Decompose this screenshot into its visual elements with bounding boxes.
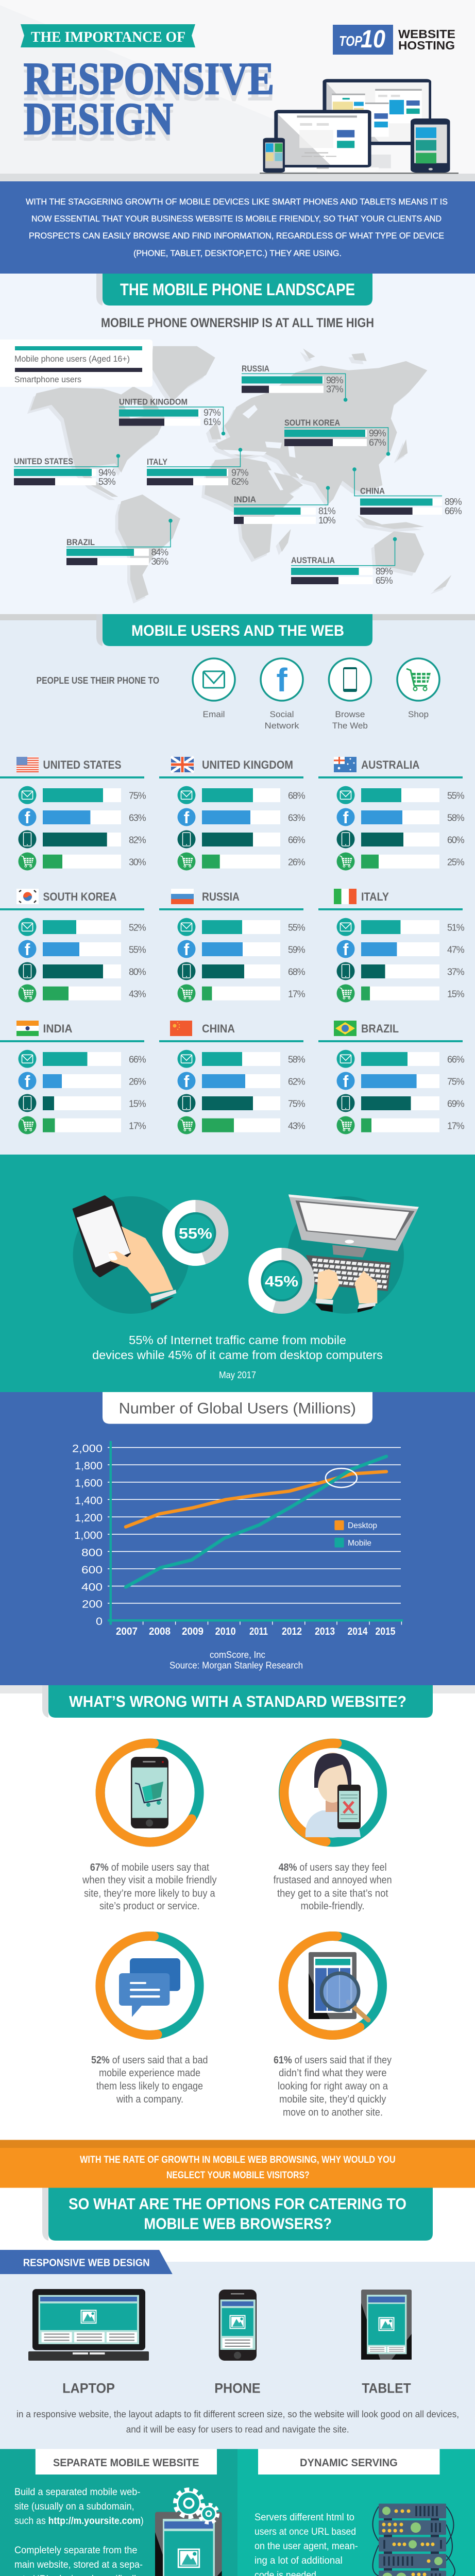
line chart: 1,400 bbox=[75, 1495, 103, 1506]
map stat: united kingdom: 61% bbox=[203, 417, 221, 427]
text: 52 percent bbox=[91, 2055, 208, 2105]
text: 67 percent: site’s product or service. bbox=[99, 1901, 200, 1912]
card: australia bbox=[318, 757, 465, 871]
card: brazil: 75% bbox=[447, 1077, 465, 1087]
card: australia: 60% bbox=[447, 835, 465, 845]
line chart: 2007 bbox=[116, 1626, 138, 1637]
card: south korea: 80% bbox=[129, 967, 146, 977]
map stat: australia: 89% bbox=[376, 566, 393, 577]
title: responsive design: RESPONSIVE bbox=[24, 60, 274, 110]
text: people use their phone to: PEOPLE USE THEIR PHONE TO bbox=[37, 675, 159, 686]
text: 52 percent: with a company. bbox=[116, 2094, 183, 2105]
line chart: 2009 bbox=[182, 1626, 203, 1637]
card: united states bbox=[0, 757, 146, 871]
card: brazil: BRAZIL bbox=[361, 1022, 399, 1035]
logo: top10 website hosting: TOP bbox=[339, 33, 362, 49]
text: 61 percent: mobile site, they’d quickly bbox=[279, 2094, 386, 2105]
flag: russia bbox=[171, 889, 194, 904]
card: south korea: 55% bbox=[129, 945, 146, 955]
chart legend: Desktop bbox=[348, 1521, 377, 1530]
card: united states: UNITED STATES bbox=[43, 758, 122, 771]
panel: number of global users chart bbox=[0, 1392, 475, 1685]
icon: server rack bbox=[373, 2504, 455, 2576]
heading: number of global users bbox=[103, 1392, 372, 1424]
caption: 55% of Internet traffic came from mobile bbox=[129, 1333, 346, 1347]
map stat: brazil: BRAZIL bbox=[66, 537, 95, 547]
heading: the mobile phone landscape: THE MOBILE PHONE LANDSCAPE bbox=[120, 280, 355, 299]
card: united kingdom: 66% bbox=[288, 835, 306, 845]
logo: top10 website hosting: HOSTING bbox=[398, 39, 455, 52]
card: india: 66% bbox=[129, 1055, 146, 1065]
card: south korea: 52% bbox=[129, 923, 146, 933]
device: phone: PHONE bbox=[214, 2380, 261, 2396]
text: 48 percent: they get to a site that’s not bbox=[277, 1888, 388, 1899]
illustration: responsive devices bbox=[260, 79, 459, 174]
subheading: MOBILE PHONE OWNERSHIP IS AT ALL TIME HIGH bbox=[101, 316, 374, 330]
text: 61 percent: move on to another site. bbox=[283, 2107, 383, 2118]
text: 67 percent: 67% of mobile users say that bbox=[90, 1862, 209, 1873]
card: russia: RUSSIA bbox=[202, 890, 240, 903]
heading: options for mobile web browsers: SO WHAT ARE THE OPTIONS FOR CATERING TO bbox=[69, 2195, 406, 2213]
heading: the mobile phone landscape bbox=[96, 274, 372, 306]
map stat: russia: 37% bbox=[326, 384, 344, 395]
card: russia bbox=[159, 889, 306, 1003]
map stat: united states: 53% bbox=[98, 477, 116, 487]
title: responsive design: DESIGN bbox=[24, 94, 173, 144]
panel: intro text: WITH THE STAGGERING GROWTH OF MOBILE DEVICES LIKE SMART PHONES AND TABLETS MEANS IT IS bbox=[26, 197, 448, 207]
line chart: 2011 bbox=[249, 1626, 268, 1637]
panel: what's wrong with a standard website bbox=[0, 1685, 475, 2140]
panel: intro text bbox=[0, 181, 475, 274]
text: separate mobile description: Completely separate from the bbox=[14, 2545, 137, 2556]
donut: 45 percent: 45% bbox=[265, 1274, 298, 1290]
card: india: 26% bbox=[129, 1077, 146, 1087]
map stat: brazil: 84% bbox=[151, 547, 168, 557]
flag: brazil bbox=[334, 1021, 357, 1036]
text: 67 percent bbox=[82, 1862, 217, 1912]
label: separate mobile website: SEPARATE MOBILE WEBSITE bbox=[53, 2457, 199, 2469]
line chart: 1,000 bbox=[74, 1530, 103, 1541]
heading: what's wrong bbox=[42, 1685, 433, 1718]
map stat: italy bbox=[147, 448, 249, 487]
text: separate mobile description: such as http://m.yoursite.com) bbox=[14, 2516, 144, 2527]
map stat: china: 89% bbox=[445, 497, 462, 507]
heading: options for mobile web browsers: MOBILE WEB BROWSERS? bbox=[144, 2214, 332, 2233]
card: china: 58% bbox=[288, 1055, 306, 1065]
donut: 55 percent bbox=[168, 1206, 222, 1260]
text: 61 percent: 61% of users said that if they bbox=[274, 2055, 392, 2066]
banner: rate of growth: WITH THE RATE OF GROWTH IN MOBILE WEB BROWSING, WHY WOULD YOU bbox=[80, 2155, 396, 2165]
map stat: united states: UNITED STATES bbox=[14, 456, 73, 466]
card: china: 75% bbox=[288, 1099, 306, 1109]
text: separate mobile description: Build a separated mobile web- bbox=[14, 2487, 140, 2498]
donut: 55 percent: 55% bbox=[179, 1226, 212, 1242]
text: dynamic serving description: ing a lot of additional bbox=[255, 2555, 343, 2566]
text: dynamic serving description: on the user agent, mean- bbox=[255, 2541, 358, 2552]
card: united kingdom: UNITED KINGDOM bbox=[202, 758, 293, 771]
panel: intro text: (PHONE, TABLET, DESKTOP,ETC.) THEY ARE USING. bbox=[133, 248, 342, 258]
card: italy: 47% bbox=[447, 945, 465, 955]
card: united states: 75% bbox=[129, 791, 146, 801]
line chart: 2015 bbox=[375, 1626, 396, 1637]
line chart: 200 bbox=[82, 1599, 103, 1611]
card: italy: 15% bbox=[447, 989, 465, 999]
map stat: india: 81% bbox=[318, 506, 336, 516]
card: brazil: 69% bbox=[447, 1099, 465, 1109]
icon: tablet and magnifier bbox=[309, 1952, 368, 2020]
label: responsive web design bbox=[0, 2250, 173, 2274]
line chart: 1,200 bbox=[75, 1512, 103, 1524]
flag: australia bbox=[334, 757, 357, 772]
map stat: india bbox=[234, 486, 336, 526]
heading: what's wrong: WHAT’S WRONG WITH A STANDARD WEBSITE? bbox=[69, 1692, 406, 1710]
stat: 52 percent bbox=[91, 1936, 208, 2105]
map stat: australia bbox=[291, 537, 397, 586]
logo: top10 website hosting: 10 bbox=[361, 26, 385, 53]
card: brazil: 17% bbox=[447, 1121, 465, 1131]
illustration: desktop and keyboard bbox=[287, 1194, 419, 1314]
banner: rate of growth: NEGLECT YOUR MOBILE VISITORS? bbox=[166, 2170, 310, 2181]
stat: 61 percent bbox=[274, 1936, 392, 2118]
line chart: 2010 bbox=[215, 1626, 236, 1637]
card: india: 17% bbox=[129, 1121, 146, 1131]
panel: mobile users and the web bbox=[0, 614, 475, 1155]
title: responsive design: RESPONSIVE bbox=[24, 54, 274, 104]
chart source: Source: Morgan Stanley Research bbox=[169, 1660, 303, 1671]
ribbon: the importance of: THE IMPORTANCE OF bbox=[31, 29, 185, 45]
card: italy: ITALY bbox=[361, 890, 389, 903]
map stat: united states bbox=[14, 454, 120, 487]
text: 67 percent: site, they’re more likely to buy a bbox=[84, 1888, 215, 1899]
map stat: india: 10% bbox=[318, 515, 336, 526]
label: dynamic serving bbox=[258, 2449, 440, 2475]
map stat: china bbox=[352, 467, 462, 516]
line chart: 600 bbox=[81, 1564, 103, 1576]
logo: top10 website hosting: WEBSITE bbox=[398, 27, 455, 41]
device: laptop bbox=[28, 2289, 149, 2396]
card: australia: 58% bbox=[447, 813, 465, 823]
icon: email: Email bbox=[203, 709, 225, 719]
map stat: china: 66% bbox=[445, 506, 462, 516]
text: 61 percent bbox=[274, 2055, 392, 2118]
panel: separate mobile website bbox=[0, 2449, 237, 2576]
map stat: brazil: 36% bbox=[151, 556, 168, 567]
card: united kingdom: 26% bbox=[288, 857, 306, 868]
device: laptop: LAPTOP bbox=[62, 2380, 115, 2396]
device: phone bbox=[214, 2290, 261, 2396]
map stat: italy: 97% bbox=[231, 468, 249, 478]
text: separate mobile description bbox=[14, 2487, 144, 2576]
text: responsive explanation: and it will be easy for users to read and navigate the site. bbox=[126, 2425, 349, 2435]
card: south korea: 43% bbox=[129, 989, 146, 999]
icon: phone with cart bbox=[131, 1757, 168, 1828]
card: south korea: SOUTH KOREA bbox=[43, 890, 117, 903]
card: brazil bbox=[318, 1021, 465, 1134]
card: russia: 55% bbox=[288, 923, 306, 933]
device: tablet bbox=[361, 2290, 412, 2396]
map stat: italy: ITALY bbox=[147, 457, 168, 467]
card: china: CHINA bbox=[202, 1022, 235, 1035]
card: italy: 51% bbox=[447, 923, 465, 933]
text: dynamic serving description: users at once URL based bbox=[255, 2527, 356, 2537]
line chart: 2013 bbox=[315, 1626, 335, 1637]
line chart: 2,000 bbox=[72, 1443, 103, 1455]
label: responsive web design: RESPONSIVE WEB DESIGN bbox=[23, 2257, 150, 2268]
text: responsive explanation bbox=[16, 2409, 459, 2435]
map stat: united kingdom bbox=[119, 397, 225, 435]
card: india: INDIA bbox=[43, 1022, 73, 1035]
chart source bbox=[169, 1650, 303, 1671]
caption: devices while 45% of it came from desktop computers bbox=[92, 1348, 383, 1362]
flag: italy bbox=[334, 889, 357, 904]
panel: dynamic serving bbox=[237, 2449, 475, 2576]
text: 52 percent: 52% of users said that a bad bbox=[91, 2055, 208, 2066]
map stat: russia: RUSSIA bbox=[242, 364, 269, 374]
panel: hero bbox=[0, 0, 475, 181]
chart legend bbox=[334, 1520, 377, 1548]
line chart: 800 bbox=[81, 1547, 103, 1558]
heading: mobile users and the web: MOBILE USERS AND THE WEB bbox=[131, 622, 344, 639]
ribbon: the importance of bbox=[21, 24, 195, 47]
text: 61 percent: looking for right away on a bbox=[278, 2080, 388, 2092]
text: 52 percent: them less likely to engage bbox=[96, 2080, 203, 2092]
panel: traffic share bbox=[0, 1155, 475, 1392]
card: united kingdom: 68% bbox=[288, 791, 306, 801]
icon: browse the web: Browse bbox=[335, 709, 365, 719]
card: india: 15% bbox=[129, 1099, 146, 1109]
panel: mobile phone landscape bbox=[0, 274, 475, 614]
line chart: 2008 bbox=[149, 1626, 171, 1637]
heading: number of global users: Number of Global Users (Millions) bbox=[119, 1400, 356, 1417]
chart legend: Mobile bbox=[348, 1539, 371, 1548]
icon: frustrated user bbox=[306, 1752, 361, 1837]
text: dynamic serving description bbox=[255, 2512, 358, 2576]
text: 48 percent bbox=[274, 1862, 392, 1912]
line chart: 2012 bbox=[282, 1626, 302, 1637]
card: australia: AUSTRALIA bbox=[361, 758, 420, 771]
card: south korea bbox=[0, 889, 146, 1003]
legend bbox=[0, 340, 152, 387]
icon: email bbox=[193, 658, 235, 719]
stat: 67 percent bbox=[82, 1743, 217, 1912]
logo: top10 website hosting bbox=[333, 25, 455, 55]
card: russia: 68% bbox=[288, 967, 306, 977]
text: 48 percent: mobile-friendly. bbox=[301, 1901, 365, 1912]
icon: social network: Network bbox=[265, 721, 299, 731]
icon: browse the web bbox=[329, 658, 371, 731]
map stat: australia: AUSTRALIA bbox=[291, 555, 335, 565]
map stat: india: INDIA bbox=[234, 495, 256, 504]
line chart: 400 bbox=[81, 1582, 103, 1593]
flag: south korea bbox=[16, 889, 39, 904]
text: dynamic serving description: Servers different html to bbox=[255, 2512, 354, 2523]
text: 61 percent: didn’t find what they were bbox=[279, 2067, 387, 2079]
panel: responsive web design bbox=[0, 2250, 475, 2449]
card: united kingdom: 63% bbox=[288, 813, 306, 823]
illustration: phone in hand bbox=[73, 1196, 190, 1314]
map stat: brazil bbox=[66, 519, 173, 567]
map stat: south korea: 67% bbox=[369, 437, 386, 448]
card: united states: 63% bbox=[129, 813, 146, 823]
text: 48 percent: frustased and annoyed when bbox=[274, 1875, 392, 1886]
line chart: 2014 bbox=[347, 1626, 368, 1637]
map stat: russia: 98% bbox=[326, 375, 344, 385]
card: china: 43% bbox=[288, 1121, 306, 1131]
map stat: south korea: SOUTH KOREA bbox=[284, 418, 340, 428]
map stat: russia bbox=[242, 364, 347, 402]
banner: rate of growth bbox=[0, 2140, 475, 2188]
flag: china bbox=[170, 1021, 192, 1036]
title: responsive design: DESIGN bbox=[24, 100, 173, 150]
caption bbox=[92, 1333, 383, 1380]
icon: tablet with gears bbox=[155, 2490, 222, 2576]
text: 67 percent: when they visit a mobile friendly bbox=[82, 1875, 217, 1886]
card: china: 62% bbox=[288, 1077, 306, 1087]
icon: browse the web: The Web bbox=[332, 721, 368, 731]
title: responsive design bbox=[24, 54, 274, 150]
card: italy: 37% bbox=[447, 967, 465, 977]
icon: chat bubbles bbox=[119, 1958, 180, 2017]
world map bbox=[27, 346, 451, 603]
card: australia: 25% bbox=[447, 857, 465, 868]
flag: united states bbox=[16, 757, 39, 772]
icon: social network: Social bbox=[270, 709, 294, 719]
icon: shop: Shop bbox=[408, 709, 429, 719]
card: china bbox=[159, 1021, 306, 1134]
icon: social network bbox=[261, 658, 303, 731]
map stat: united kingdom: UNITED KINGDOM bbox=[119, 397, 188, 407]
card: russia: 59% bbox=[288, 945, 306, 955]
line chart: 1,600 bbox=[75, 1478, 103, 1489]
text: 48 percent: 48% of users say they feel bbox=[279, 1862, 387, 1873]
map stat: south korea bbox=[284, 418, 390, 456]
heading: options for mobile web browsers bbox=[0, 2188, 475, 2262]
card: australia: 55% bbox=[447, 791, 465, 801]
caption: May 2017 bbox=[219, 1370, 256, 1380]
panel: intro text: PROSPECTS CAN EASILY BROWSE AND FIND INFORMATION, REGARDLESS OF WHAT TYPE OF DEVICE bbox=[29, 231, 444, 241]
line chart bbox=[72, 1441, 403, 1637]
card: italy bbox=[318, 889, 465, 1003]
map stat: south korea: 99% bbox=[369, 428, 386, 438]
card: russia: 17% bbox=[288, 989, 306, 999]
line chart: 0 bbox=[96, 1616, 103, 1628]
chart source: comScore, Inc bbox=[210, 1650, 265, 1660]
label: dynamic serving: DYNAMIC SERVING bbox=[300, 2457, 398, 2469]
flag: united kingdom bbox=[171, 757, 194, 772]
stat: 48 percent bbox=[274, 1743, 392, 1912]
legend: Mobile phone users (Aged 16+) bbox=[14, 354, 130, 364]
map stat: australia: 65% bbox=[376, 575, 393, 586]
device: tablet: TABLET bbox=[362, 2380, 411, 2396]
card: united states: 82% bbox=[129, 835, 146, 845]
map stat: china: CHINA bbox=[360, 486, 385, 496]
heading: mobile users and the web bbox=[96, 614, 372, 646]
card: united kingdom bbox=[159, 757, 306, 871]
legend: Smartphone users bbox=[14, 375, 81, 384]
text: separate mobile description: site (usually on a subdomain, bbox=[14, 2501, 134, 2512]
icon: social network: f bbox=[276, 662, 287, 699]
card: india bbox=[0, 1021, 146, 1134]
text: 52 percent: mobile experience made bbox=[99, 2067, 200, 2079]
map stat: italy: 62% bbox=[231, 477, 249, 487]
panel: intro text: NOW ESSENTIAL THAT YOUR BUSINESS WEBSITE IS MOBILE FRIENDLY, SO THAT YOUR CLIENTS AND bbox=[31, 214, 442, 224]
text: separate mobile description: main website, stored at a sepa- bbox=[14, 2560, 143, 2570]
text: responsive explanation: in a responsive website, the layout adapts to fit different screen size, so the website will look good on all devices, bbox=[16, 2409, 459, 2419]
donut: 45 percent bbox=[255, 1254, 308, 1308]
map stat: united states: 94% bbox=[98, 468, 116, 478]
flag: india bbox=[16, 1021, 39, 1036]
icon: shop bbox=[397, 658, 439, 719]
map stat: united kingdom: 97% bbox=[203, 408, 221, 418]
line chart: 1,800 bbox=[75, 1460, 103, 1472]
card: brazil: 66% bbox=[447, 1055, 465, 1065]
label: separate mobile website bbox=[36, 2449, 217, 2475]
card: united states: 30% bbox=[129, 857, 146, 868]
